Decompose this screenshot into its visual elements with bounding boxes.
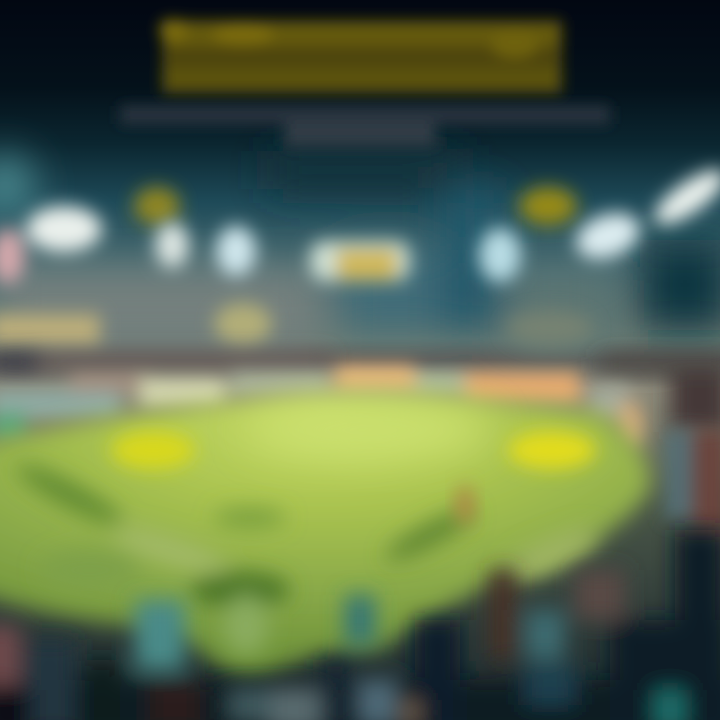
yellow stadium signs, upper xyxy=(134,187,577,225)
lower stand signs xyxy=(0,303,594,346)
pitch surface xyxy=(0,395,650,678)
pitch stripes xyxy=(11,456,604,655)
advertising boards xyxy=(0,365,720,540)
bright centre of pitch xyxy=(250,402,490,458)
title: illegible blurred yellow heading block xyxy=(159,19,562,94)
crowd silhouettes xyxy=(0,530,720,720)
pitch xyxy=(0,395,650,678)
yellow pitch markings xyxy=(111,431,596,469)
player on pitch xyxy=(456,485,474,525)
dark band above advertising boards xyxy=(0,352,720,432)
subtitle: illegible blurred grey lines xyxy=(120,106,610,146)
floodlights xyxy=(0,161,720,284)
central lit sign xyxy=(310,241,410,281)
stand haze xyxy=(0,150,720,350)
